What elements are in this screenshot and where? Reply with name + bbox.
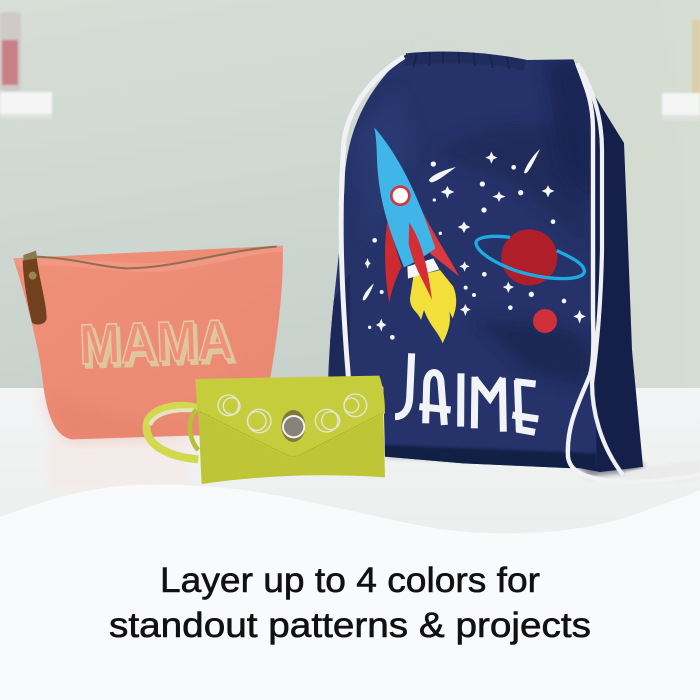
rocket body bbox=[374, 127, 435, 267]
fabric shading bbox=[330, 60, 597, 473]
pouch body bbox=[13, 246, 283, 439]
small red moon bbox=[533, 309, 557, 333]
shadow under bag bbox=[385, 448, 645, 476]
left shelf with jar bbox=[0, 12, 52, 119]
gathered drawstring channel bbox=[405, 51, 527, 71]
comets bbox=[429, 167, 456, 182]
right drawstring second strand bbox=[580, 67, 623, 475]
letter E bbox=[512, 380, 538, 432]
bag flap bbox=[195, 376, 385, 458]
navy drawstring bag bbox=[328, 51, 700, 484]
letter M bbox=[474, 377, 503, 432]
bag back panel bbox=[560, 62, 643, 472]
coral zip pouch bbox=[13, 246, 385, 484]
white wave panel bbox=[0, 485, 700, 700]
pouch zip band bbox=[13, 246, 283, 272]
rocket window bbox=[390, 185, 411, 206]
rocket bbox=[374, 127, 459, 343]
JAIME lettering bbox=[395, 353, 538, 432]
bag front panel bbox=[328, 53, 597, 468]
letter A bbox=[419, 372, 451, 425]
rocket nozzle bbox=[407, 258, 439, 279]
leather zip pull bbox=[23, 251, 47, 325]
caption line 1: Layer up to 4 colors for bbox=[160, 561, 540, 600]
rope tail on table bbox=[625, 460, 700, 484]
table surface bbox=[0, 388, 700, 548]
pouch lower shading bbox=[45, 387, 200, 439]
belt strap bbox=[147, 406, 198, 459]
left drawstring bbox=[341, 57, 404, 377]
rocket left fin bbox=[385, 222, 402, 303]
right shelf with jar bbox=[662, 20, 700, 120]
MAMA lettering: MAMA bbox=[81, 313, 237, 381]
bag body bbox=[197, 407, 385, 484]
pouch reflection on table bbox=[48, 440, 188, 490]
MAMA lettering: MAMA bbox=[78, 309, 234, 377]
rocket right fin bbox=[421, 208, 459, 277]
snap button bbox=[281, 410, 305, 442]
caption bbox=[109, 561, 591, 645]
rocket flame bbox=[410, 270, 456, 343]
letter J bbox=[395, 353, 412, 417]
saturn planet bbox=[476, 229, 584, 285]
white stars and dots bbox=[363, 149, 586, 340]
silver moons bbox=[218, 394, 367, 433]
letter I bbox=[450, 373, 471, 427]
caption line 2: standout patterns & projects bbox=[109, 606, 591, 645]
rocket centre fin bbox=[409, 223, 432, 300]
right drawstring loop bbox=[568, 63, 700, 482]
green belt bag bbox=[147, 376, 385, 484]
wall background bbox=[0, 0, 700, 390]
